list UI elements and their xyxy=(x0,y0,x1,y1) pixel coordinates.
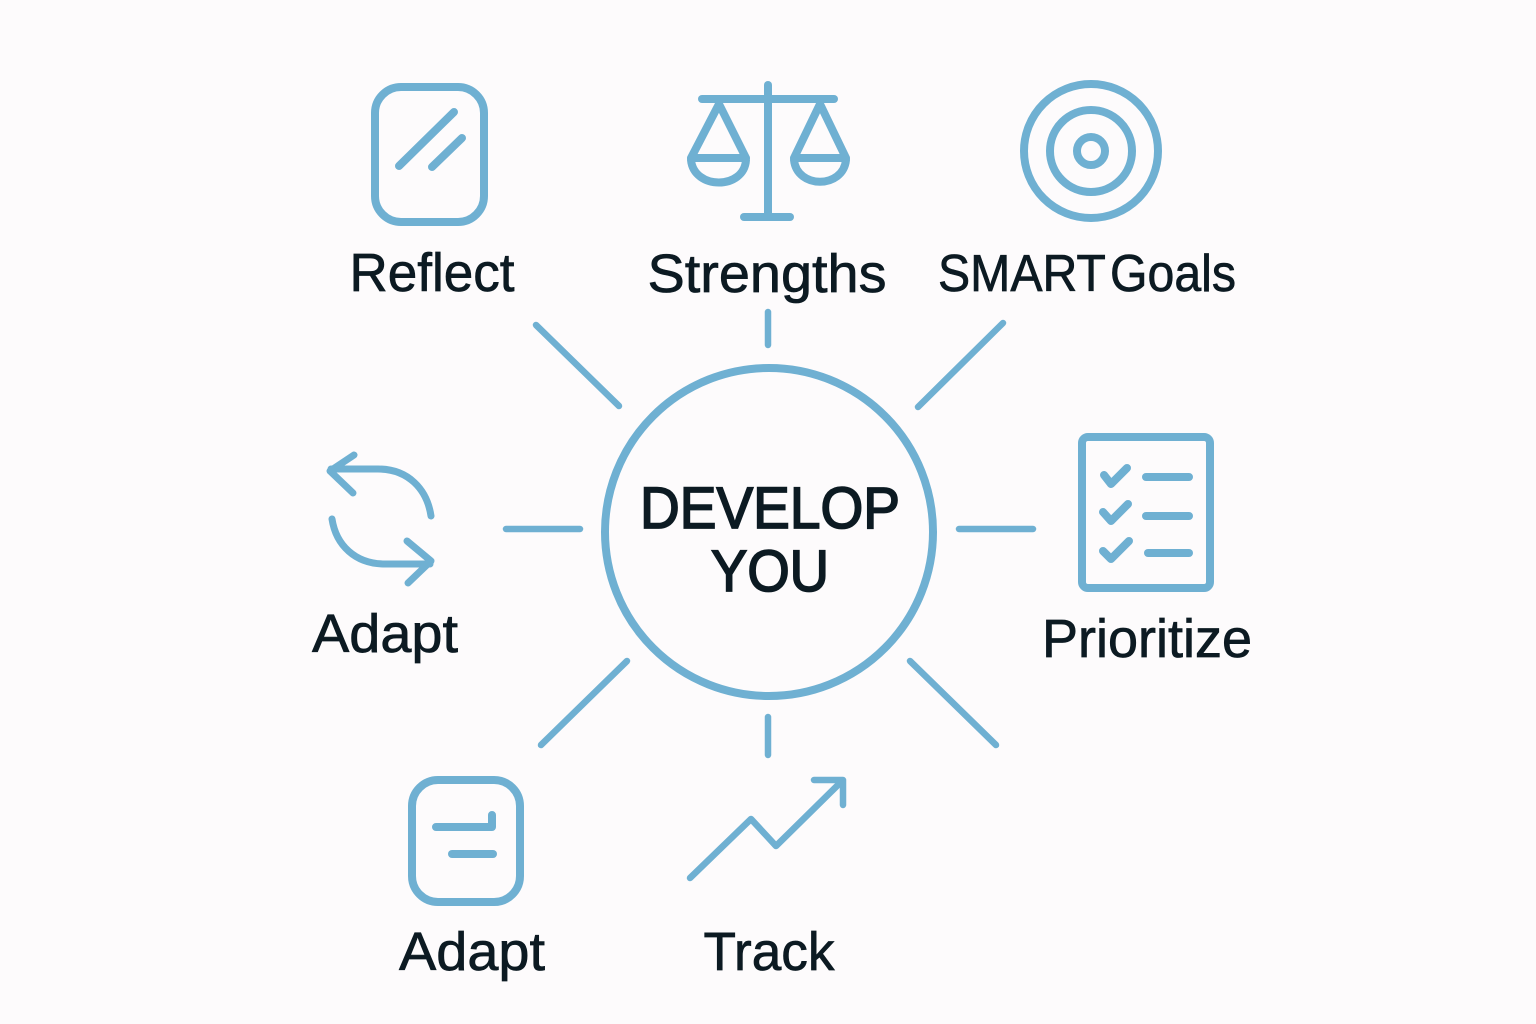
connector spokes xyxy=(506,312,1033,755)
label: Adapt (bottom): Adapt xyxy=(399,922,545,982)
icon: prioritize checklist xyxy=(1082,437,1210,588)
label: Adapt (left): Adapt xyxy=(312,604,458,664)
central circle: Develop You: YOU xyxy=(711,539,829,604)
label: SMART Goals: SMART Goals xyxy=(938,245,1236,303)
central circle: Develop You xyxy=(605,368,933,696)
icon: target xyxy=(1024,84,1158,218)
icon: track rising arrow xyxy=(690,780,843,878)
icon: adapt cycle arrows xyxy=(330,455,431,583)
central circle: Develop You: DEVELOP xyxy=(640,476,900,541)
label: Strengths: Strengths xyxy=(648,244,886,304)
icon: reflect mirror xyxy=(375,87,484,222)
label: Prioritize: Prioritize xyxy=(1042,609,1252,669)
icon: adapt rounded panel xyxy=(412,780,520,902)
label: Reflect: Reflect xyxy=(350,243,514,303)
icon: balance scale xyxy=(691,85,846,217)
label: Track: Track xyxy=(704,922,835,982)
